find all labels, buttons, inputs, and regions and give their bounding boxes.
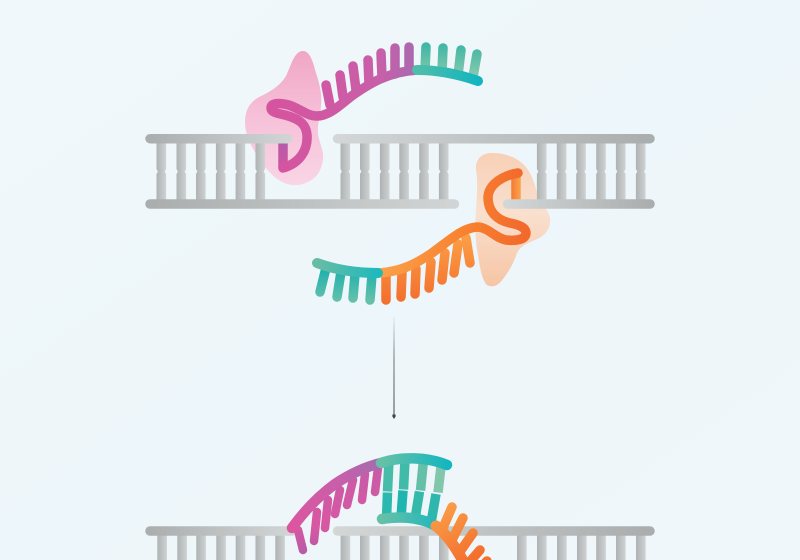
teeth: orange <box>386 238 470 300</box>
magenta arc with teeth <box>292 463 381 550</box>
teeth: magenta <box>326 47 409 105</box>
arrow: downward <box>392 317 396 419</box>
teeth: teal <box>320 268 372 300</box>
teeth: magenta <box>298 468 378 550</box>
DNA rungs: lower row <box>157 535 646 560</box>
DNA backbones: top row <box>150 139 650 204</box>
stem: orange <box>511 175 521 200</box>
backbone: magenta <box>271 70 417 168</box>
orange RNA strand <box>317 173 526 300</box>
backbone: magenta <box>292 463 381 528</box>
protein blob: pink <box>245 51 323 185</box>
pink RNA strand <box>271 47 478 168</box>
protein blob: peach <box>475 153 550 286</box>
diagram: top DNA with two RNA-bound proteins <box>150 47 650 300</box>
backbone: orange <box>378 173 526 273</box>
teeth: orange <box>442 507 487 560</box>
orange tail with teeth <box>436 507 487 560</box>
teeth: teal <box>425 47 477 77</box>
DNA rungs: top row <box>156 143 646 200</box>
stem: magenta <box>278 143 288 168</box>
DNA backbones: lower row <box>150 526 650 536</box>
backbone: teal <box>417 70 478 81</box>
diagram: annealed product on DNA <box>150 458 650 560</box>
backbone: orange <box>436 526 466 560</box>
backbone: teal <box>317 263 378 273</box>
teal upper backbone <box>381 458 447 465</box>
annealed teal rungs <box>386 460 442 523</box>
teal lower backbone <box>382 517 436 526</box>
